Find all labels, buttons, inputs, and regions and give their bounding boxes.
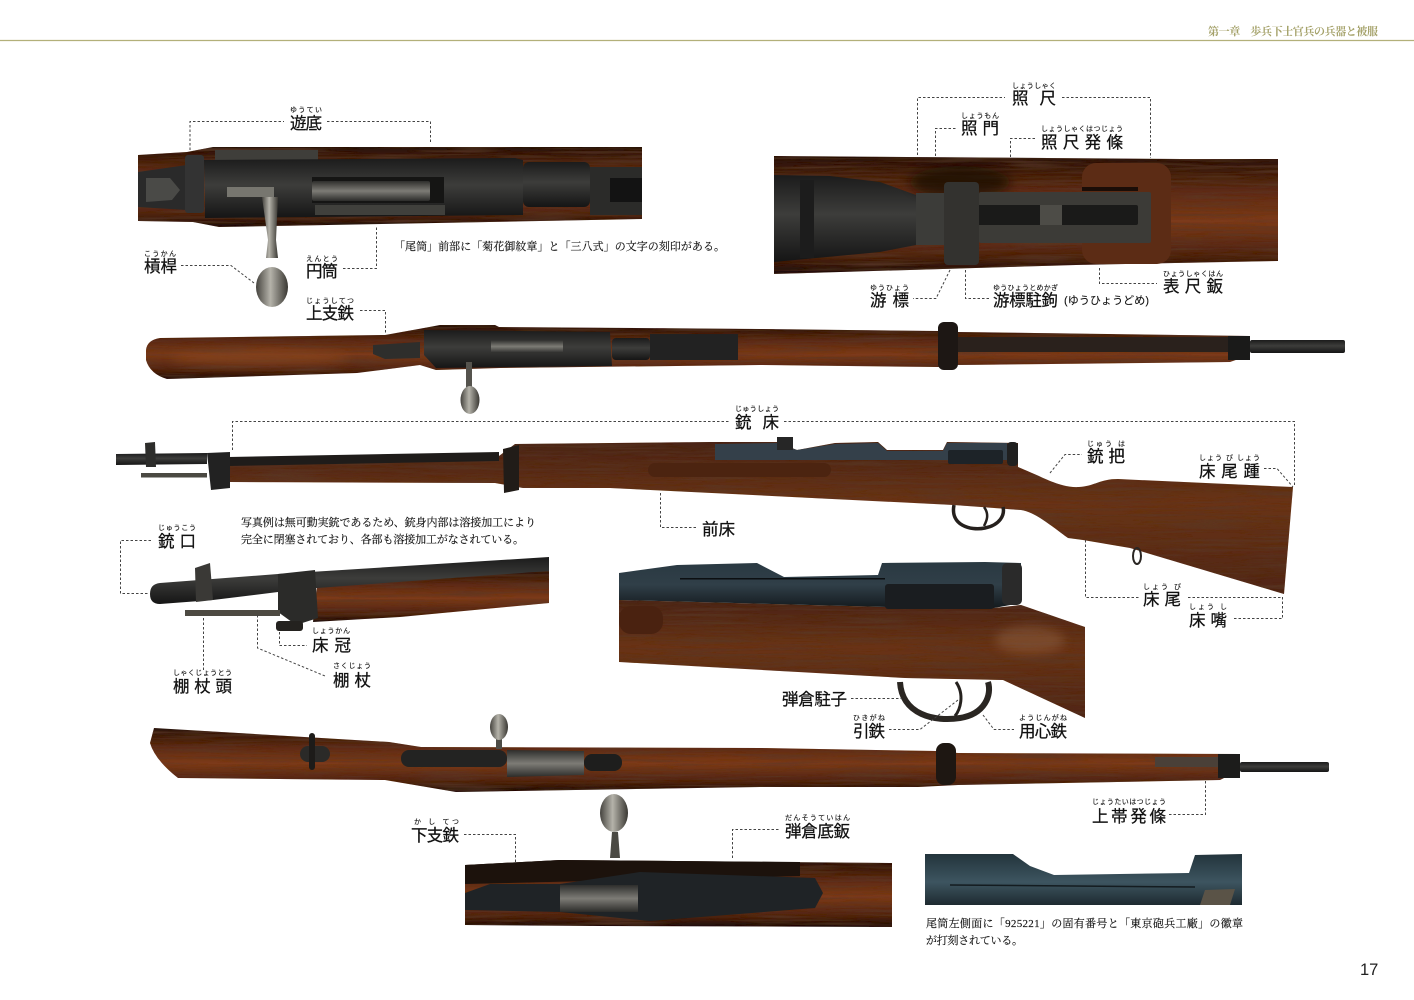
label: 游標駐鉤 — [966, 270, 1149, 310]
page header: 第一章 歩兵下士官兵の兵器と被服 — [1208, 24, 1378, 38]
photo: receiver left side marking — [925, 854, 1242, 905]
label: 游標: ゆうひょう — [870, 284, 909, 292]
label: 弾倉駐子 — [782, 690, 902, 709]
label: 棚杖頭: 棚 杖 頭 — [173, 677, 232, 696]
label: 引鉄: 引鉄 — [853, 722, 886, 741]
caption: deactivated rifle note: 写真例は無可動実銃であるため、銃身内部は溶接加工により — [241, 515, 536, 529]
label: 引鉄 — [853, 700, 958, 741]
label: 游標: 游 標 — [870, 291, 909, 310]
label: 表尺鈑 — [1100, 268, 1224, 296]
label: 上支鉄 — [306, 297, 386, 333]
label: 銃床: じゅうしょう — [735, 405, 779, 413]
label: 床嘴: 床 嘴 — [1189, 611, 1227, 630]
caption: deactivated rifle note: 完全に閉塞されており、各部も溶接加工がなされている。 — [241, 532, 524, 546]
label: 弾倉底鈑 — [732, 814, 850, 858]
label: 游標駐鉤: (ゆうひょうどめ) — [1064, 294, 1149, 307]
label: 銃口: 銃 口 — [158, 532, 196, 551]
label: 棚杖頭: しゃくじょうとう — [173, 669, 232, 677]
label: 照尺: 照 尺 — [1012, 90, 1056, 108]
label: 床嘴: しょう し — [1189, 603, 1227, 611]
label: 床尾 — [1086, 540, 1282, 609]
label: 銃床: 銃 床 — [735, 413, 779, 432]
label: 床冠 — [280, 627, 351, 655]
label: 照尺 — [918, 82, 1150, 158]
label: 游標 — [870, 270, 950, 310]
label: 引鉄: ひきがね — [853, 713, 885, 722]
page number: 17 — [1360, 961, 1378, 979]
label: 遊底: ゆうてい — [290, 106, 322, 114]
label: 槓桿: 槓桿 — [144, 257, 177, 276]
label: 游標駐鉤: 游標駐鉤 — [993, 291, 1058, 310]
label: 照尺発條: しょうしゃくはつじょう — [1041, 125, 1123, 133]
label: 円筒: 円筒 — [306, 262, 338, 281]
label: 床嘴 — [1189, 597, 1282, 630]
label: 床冠: しょうかん — [312, 627, 350, 635]
label: 上支鉄: 上支鉄 — [306, 304, 354, 323]
label: 弾倉底鈑: 弾倉底鈑 — [785, 822, 850, 841]
label: 用心鉄 — [983, 713, 1068, 741]
label: 下支鉄 — [411, 818, 516, 862]
label: 弾倉底鈑: だんそうていはん — [785, 814, 850, 822]
label: 棚杖頭 — [173, 618, 232, 696]
label: 弾倉駐子: 弾倉駐子 — [782, 690, 847, 709]
rifle: underside view — [150, 714, 1329, 792]
label: 遊底 — [190, 106, 430, 150]
label: 下支鉄: か し てつ — [414, 818, 459, 826]
label: 床尾踵: 床 尾 踵 — [1199, 462, 1260, 481]
photo: floor plate detail — [465, 794, 892, 927]
label: 前床: 前床 — [702, 520, 735, 539]
label: 照尺: しょうしゃく — [1012, 82, 1056, 90]
label: 照門 — [936, 112, 999, 156]
label: 床尾: しょう び — [1143, 583, 1181, 591]
label: 上帯発條: 上 帯 発 條 — [1092, 807, 1166, 826]
label: 槓桿: こうかん — [144, 250, 176, 258]
caption: serial number note: 尾筒左側面に「925221」の固有番号と「東京砲兵工廠」の徽章 — [926, 916, 1243, 930]
label: 前床 — [660, 493, 735, 539]
label: 床尾踵: しょう び しょう — [1199, 454, 1260, 462]
label: 照門: しょうもん — [961, 112, 999, 120]
label: 円筒: えんとう — [306, 255, 338, 263]
label: 用心鉄: 用心鉄 — [1019, 722, 1068, 741]
label: 円筒 — [306, 227, 376, 281]
label: 銃口: じゅうこう — [158, 524, 196, 532]
label: 照門: 照 門 — [961, 120, 999, 138]
label: 用心鉄: ようじんがね — [1019, 713, 1067, 722]
rifle: side view — [116, 437, 1293, 594]
photo: magazine and trigger guard detail — [619, 562, 1085, 719]
rifle: top view — [146, 322, 1345, 414]
caption: receiver marking: 「尾筒」前部に「菊花御紋章」と「三八式」の文字の刻印がある。 — [394, 239, 725, 253]
label: 上帯発條 — [1092, 780, 1206, 826]
label: 棚杖 — [258, 615, 371, 690]
label: 遊底: 遊底 — [290, 114, 322, 133]
label: 上支鉄: じょうしてつ — [306, 297, 354, 305]
caption: serial number note — [926, 916, 1243, 947]
caption: deactivated rifle note — [241, 515, 536, 546]
label: 照尺発條 — [1010, 125, 1124, 157]
label: 下支鉄: 下支鉄 — [411, 826, 460, 845]
label: 銃把: じゅう は — [1087, 440, 1125, 448]
photo: rear sight top view — [774, 156, 1278, 274]
label: 表尺鈑: ひょうしゃくはん — [1163, 270, 1223, 278]
label: 銃把: 銃 把 — [1087, 447, 1125, 466]
photo: receiver top view — [138, 147, 642, 307]
label: 上帯発條: じょうたいはつじょう — [1092, 798, 1166, 806]
label: 銃把 — [1050, 440, 1125, 473]
label: 床尾踵 — [1199, 454, 1293, 487]
label: 銃床 — [232, 405, 1294, 487]
label: 游標駐鉤: ゆうひょうとめかぎ — [993, 283, 1058, 292]
label: 棚杖: さくじょう — [333, 662, 371, 670]
label: 銃口 — [120, 524, 196, 594]
label: 槓桿 — [144, 250, 254, 283]
label: 床尾: 床 尾 — [1143, 590, 1181, 609]
photo: muzzle detail — [150, 557, 549, 631]
caption: serial number note: が打刻されている。 — [926, 933, 1023, 947]
label: 表尺鈑: 表 尺 鈑 — [1163, 277, 1224, 296]
label: 棚杖: 棚 杖 — [333, 671, 371, 690]
label: 床冠: 床 冠 — [312, 636, 351, 655]
label: 照尺発條: 照 尺 発 條 — [1041, 133, 1124, 152]
